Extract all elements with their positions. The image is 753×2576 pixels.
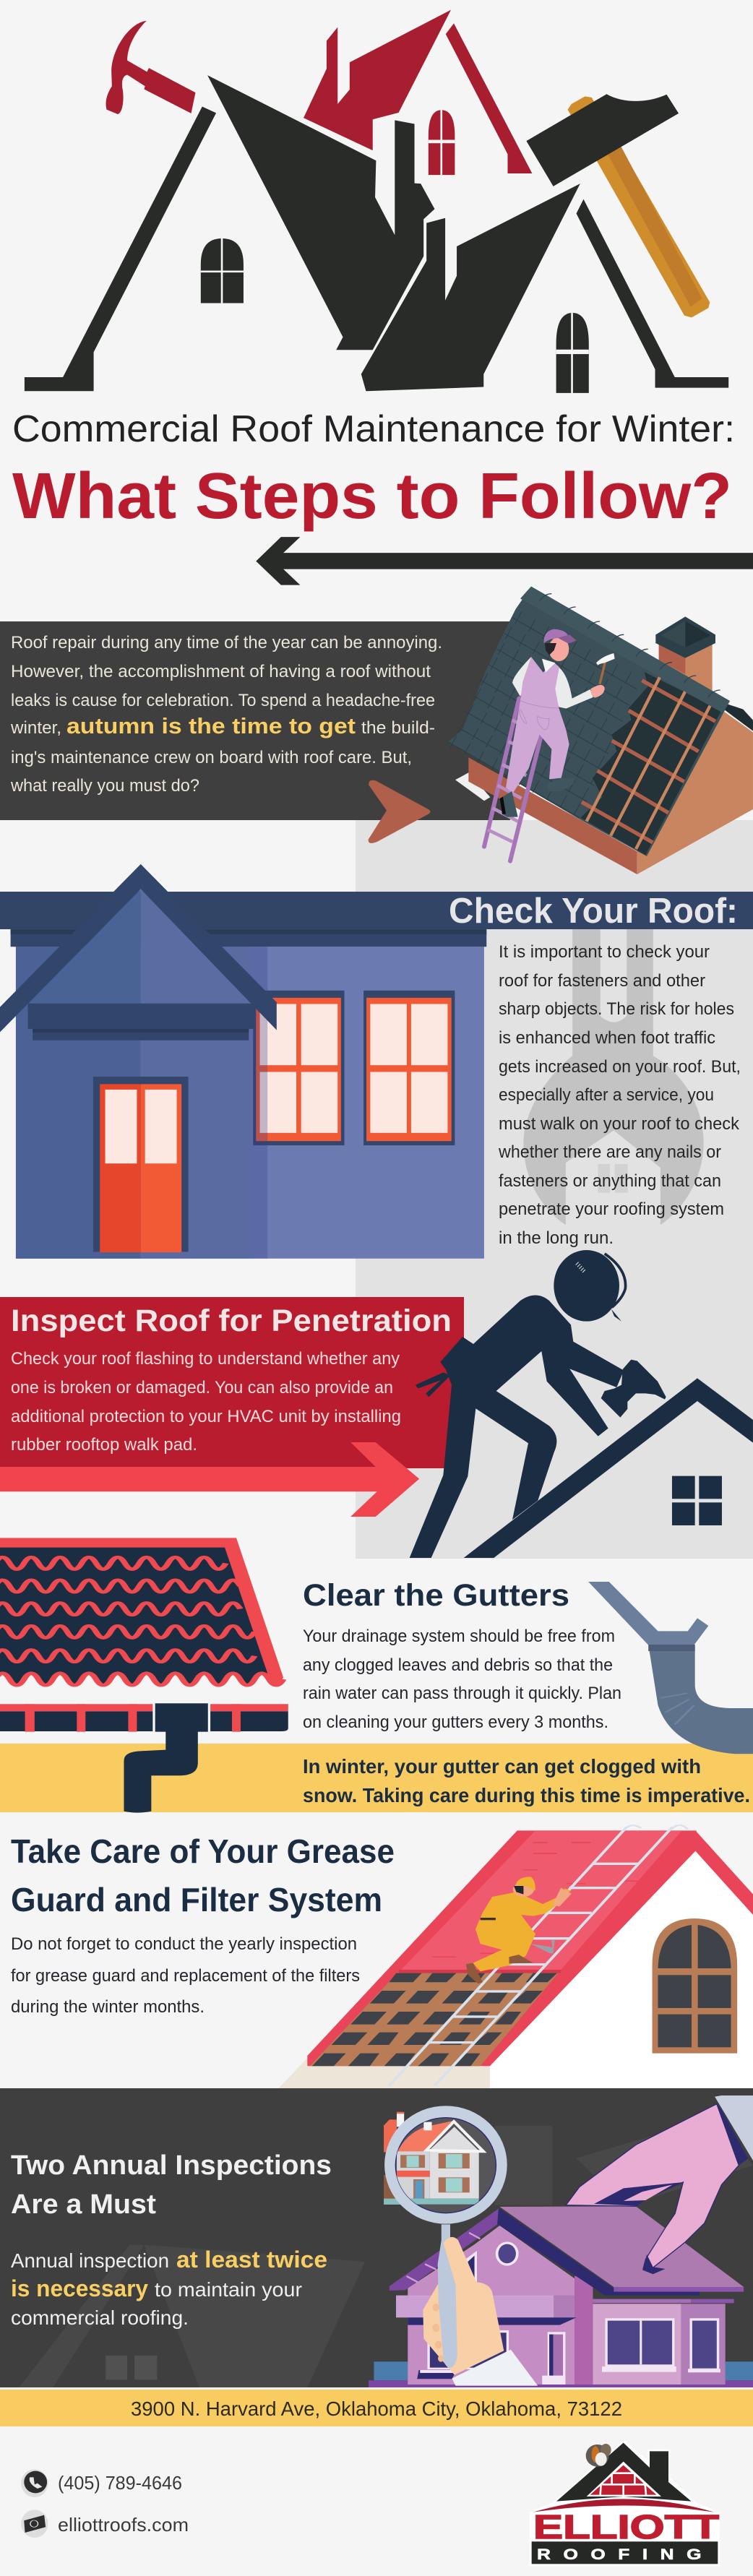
icon: phone	[21, 2469, 48, 2497]
text: intro paragraph	[10, 633, 442, 796]
contact: website: elliottroofs.com	[58, 2514, 189, 2536]
arrow: brick chevron	[369, 780, 430, 843]
panel: two annual inspections	[0, 2088, 753, 2387]
logo: Elliott Roofing: ELLIOTT	[533, 2508, 719, 2546]
text: check your roof paragraph: roof for fasteners and other	[499, 971, 705, 991]
heading	[11, 1832, 395, 1918]
text: inspections paragraph: to maintain your	[155, 2278, 302, 2301]
contact: phone	[21, 2469, 182, 2497]
text: intro paragraph: ing's maintenance crew on board with roof care. But,	[11, 748, 412, 767]
heading: Are a Must	[11, 2189, 156, 2220]
title: Commercial Roof Maintenance for Winter:	[12, 408, 735, 450]
illustration: house with red roof and worker	[278, 1825, 753, 2088]
icon: large mallet	[526, 94, 710, 317]
panel: intro	[0, 587, 753, 874]
title: What Steps to Follow?	[12, 460, 732, 533]
logo: Elliott Roofing	[530, 2440, 720, 2567]
text: check your roof paragraph: especially after a service, you	[499, 1085, 714, 1105]
text: gutters paragraph	[303, 1627, 621, 1732]
holding hand	[423, 2282, 504, 2375]
text: intro paragraph: leaks is cause for celebration. To spend a headache-free	[11, 691, 435, 710]
text: gutters paragraph: any clogged leaves and debris so that the	[303, 1655, 613, 1675]
text: check your roof paragraph: is enhanced when foot traffic	[499, 1028, 715, 1048]
logo: Elliott Roofing: ROOFING	[537, 2546, 714, 2563]
text: inspections paragraph	[11, 2247, 327, 2329]
illustration: magnifier, hand and purple house	[369, 2095, 753, 2387]
text: grease paragraph: during the winter months.	[11, 1997, 205, 2017]
faded house watermark	[20, 2117, 753, 2387]
icon: right window	[556, 313, 589, 393]
title	[12, 408, 735, 533]
address band: 3900 N. Harvard Ave, Oklahoma City, Oklahoma, 73122	[131, 2398, 622, 2420]
ladder	[389, 1825, 688, 2086]
arrow pointing left	[256, 537, 753, 585]
text: grease paragraph: Do not forget to conduct the yearly inspection	[11, 1934, 357, 1954]
icon: red window	[429, 110, 455, 175]
panel: grease guard and filter	[11, 1825, 753, 2088]
yellow band	[0, 1744, 753, 1812]
text: inspect paragraph: Check your roof flashing to understand whether any	[11, 1349, 400, 1369]
illustration: downspout	[588, 1582, 753, 1754]
heading band	[0, 892, 753, 929]
magnifier handle	[438, 2224, 457, 2368]
icon: email	[21, 2510, 48, 2538]
text: intro paragraph: winter,	[10, 718, 61, 738]
heading: Inspect Roof for Penetration	[11, 1304, 452, 1338]
text: check your roof paragraph: fasteners or anything that can	[499, 1171, 721, 1191]
ladder	[484, 699, 541, 861]
text: check your roof paragraph: must walk on your roof to check	[499, 1114, 740, 1134]
illustration: blue house	[0, 864, 486, 1259]
text: intro paragraph: what really you must do?	[10, 776, 199, 796]
panel: clear the gutters	[0, 1538, 753, 1813]
text: check your roof paragraph	[498, 942, 741, 1248]
address band	[0, 2387, 753, 2426]
icon: red claw hammer	[106, 21, 195, 114]
text: inspections paragraph: is necessary	[11, 2275, 148, 2301]
hero house illustration	[25, 10, 728, 393]
text: intro paragraph: Roof repair during any time of the year can be annoying.	[11, 633, 442, 652]
windows	[605, 2318, 674, 2366]
icon: dog	[586, 2444, 611, 2467]
text: inspections paragraph: commercial roofing.	[11, 2306, 189, 2329]
text: check your roof paragraph: in the long run.	[499, 1228, 614, 1248]
magnifier lens	[384, 2106, 507, 2224]
window	[653, 1918, 737, 2054]
text: inspect paragraph: one is broken or damaged. You can also provide an	[11, 1378, 393, 1397]
heading	[11, 2150, 332, 2220]
worker	[512, 657, 531, 697]
text: check your roof paragraph: whether there are any nails or	[498, 1142, 721, 1162]
text: grease paragraph	[11, 1934, 360, 2017]
text: inspections paragraph: Annual inspection	[11, 2249, 169, 2272]
light grey backdrop panel	[356, 820, 753, 1559]
house walls	[408, 2226, 575, 2385]
text: intro paragraph: autumn is the time to get	[66, 713, 356, 738]
text: check your roof paragraph: gets increased on your roof. But,	[499, 1057, 741, 1077]
illustration: roofer on ladder	[448, 587, 753, 874]
roof	[500, 2206, 744, 2287]
text: gutters paragraph: rain water can pass through it quickly. Plan	[303, 1684, 621, 1703]
windows	[253, 991, 345, 1145]
text: intro paragraph: However, the accomplishment of having a roof without	[11, 662, 431, 681]
heading: Clear the Gutters	[303, 1578, 569, 1613]
text: inspections paragraph: at least twice	[176, 2247, 327, 2273]
contact: website	[21, 2510, 189, 2538]
worker	[473, 1888, 572, 1971]
text: gutters paragraph: on cleaning your gutters every 3 months.	[303, 1713, 608, 1732]
text: gutters paragraph: Your drainage system should be free from	[303, 1627, 615, 1646]
illustration: tiled roof and gutter	[0, 1538, 288, 1813]
door	[93, 1077, 189, 1252]
text: check your roof paragraph: It is important to check your	[499, 942, 710, 962]
callout: winter snow note: In winter, your gutter can get clogged with	[303, 1755, 701, 1778]
illustration: worker silhouette on roof	[410, 1250, 753, 1558]
text: inspect paragraph: rubber rooftop walk pad.	[11, 1435, 197, 1455]
heading: Check Your Roof:	[449, 892, 738, 931]
text: inspect paragraph: additional protection to your HVAC unit by installing	[11, 1407, 401, 1426]
text: intro paragraph: the build-	[361, 718, 435, 738]
text: inspect paragraph	[11, 1349, 401, 1455]
heading: Two Annual Inspections	[11, 2150, 332, 2181]
icon: left window	[201, 238, 244, 303]
panel: inspect roof for penetration	[0, 1250, 753, 1558]
icon: wrench watermark	[523, 929, 704, 1225]
heading: Guard and Filter System	[11, 1881, 382, 1918]
callout: winter snow note	[303, 1755, 750, 1806]
text: check your roof paragraph: sharp objects. The risk for holes	[499, 999, 734, 1019]
panel: check your roof	[0, 864, 753, 1259]
text: grease paragraph: for grease guard and replacement of the filters	[11, 1966, 360, 1986]
arrow pointing right	[0, 1442, 419, 1517]
text: check your roof paragraph: penetrate your roofing system	[499, 1199, 724, 1219]
heading: Take Care of Your Grease	[11, 1832, 395, 1870]
big hand	[715, 2095, 753, 2161]
contact: phone: (405) 789-4646	[58, 2472, 182, 2494]
small house outside glass	[384, 2119, 397, 2152]
